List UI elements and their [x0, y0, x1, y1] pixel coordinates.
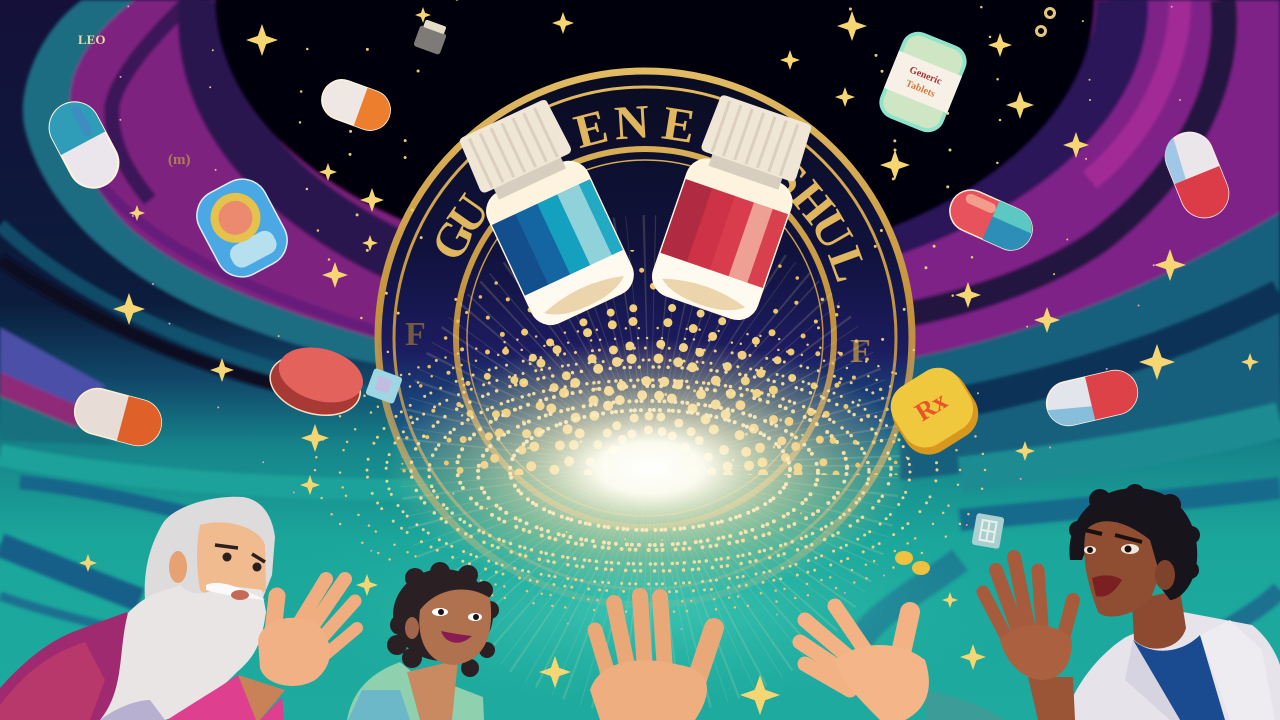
- raised hand: centre left: [590, 596, 714, 720]
- faint gold mark: (m): [168, 152, 190, 168]
- magenta left: [70, 0, 640, 345]
- pill: blue and white, top left: [41, 94, 127, 196]
- pink sleeve: [167, 675, 258, 720]
- curly hair: [387, 562, 499, 677]
- red label: [660, 179, 788, 288]
- dark curly hair: [1069, 484, 1200, 600]
- central white glow: [385, 338, 915, 598]
- neck: [1132, 590, 1186, 649]
- raised hand: centre right: [800, 606, 1005, 720]
- face: [1084, 521, 1160, 616]
- white beard: [100, 585, 266, 720]
- magenta robe: [0, 612, 160, 720]
- ring letters: [405, 95, 878, 370]
- tablet: yellow stamped: [880, 358, 988, 464]
- bottle: red label: [648, 92, 818, 324]
- ring letters: N: [613, 95, 651, 150]
- pill: white-blue and red, lower right: [1042, 366, 1142, 430]
- two small gold pills: [895, 551, 930, 575]
- bottle cap: [700, 93, 814, 183]
- radial rays from the burst: [525, 340, 775, 590]
- glass cube fragment: [365, 368, 403, 404]
- ring letters: E: [569, 100, 613, 159]
- person: young scientist in lab coat: [1064, 484, 1280, 720]
- person: old man with white beard: [0, 497, 357, 720]
- ring letters: U: [800, 202, 863, 259]
- medallion ring with lettering: [378, 71, 912, 605]
- ring letters: E: [659, 96, 699, 154]
- ring letters: G: [421, 211, 485, 269]
- teal sleeve: [925, 690, 1005, 720]
- ring letters: F: [850, 333, 871, 370]
- right lower bands: [900, 200, 1280, 480]
- teal ring left: [23, 0, 640, 366]
- ring letters: F: [405, 316, 426, 353]
- central black void: [215, 0, 1095, 270]
- tablet: red round disc: [263, 337, 369, 425]
- small green bottle: Generic: [908, 65, 944, 88]
- ring letters: S: [762, 149, 817, 206]
- small drifting vial: [413, 18, 449, 55]
- face: [197, 522, 266, 612]
- sparkle particles: dense lower dust: [315, 328, 985, 612]
- raised hand: dark skin: [983, 557, 1075, 720]
- ring letters: L: [817, 240, 878, 288]
- shirt: [347, 662, 484, 720]
- small links top right: [1036, 8, 1054, 36]
- face: [419, 589, 491, 665]
- magenta right: [640, 0, 1280, 360]
- ring letters: H: [780, 171, 845, 234]
- white lab coat: [1064, 612, 1280, 720]
- pill: white and red, far right: [1158, 125, 1236, 225]
- bottle: blue label: [453, 96, 639, 330]
- small green bottle: [875, 28, 971, 136]
- left lower bands: [0, 327, 105, 414]
- bottle cap: [457, 98, 573, 194]
- person: child with curly hair: [347, 562, 499, 720]
- tablet: yellow stamped: Rx: [910, 386, 952, 427]
- sparkle particles: large upper orbs: [402, 250, 898, 475]
- small green bottle: Tablets: [904, 78, 937, 100]
- hand: [258, 579, 357, 686]
- starfield of small gold dots: [120, 0, 1180, 630]
- pill: white and orange, top: [316, 74, 396, 136]
- small label top left: LEO: [78, 32, 105, 47]
- blue label: [492, 179, 623, 296]
- ring letters: U: [437, 185, 500, 244]
- pill: red and teal, right: [943, 183, 1039, 257]
- navy shirt: [1133, 635, 1225, 720]
- small blister pack: [971, 513, 1005, 549]
- pill: white and orange, left: [70, 383, 166, 451]
- tablet: blue round badge: [188, 170, 296, 286]
- hair: [145, 497, 275, 610]
